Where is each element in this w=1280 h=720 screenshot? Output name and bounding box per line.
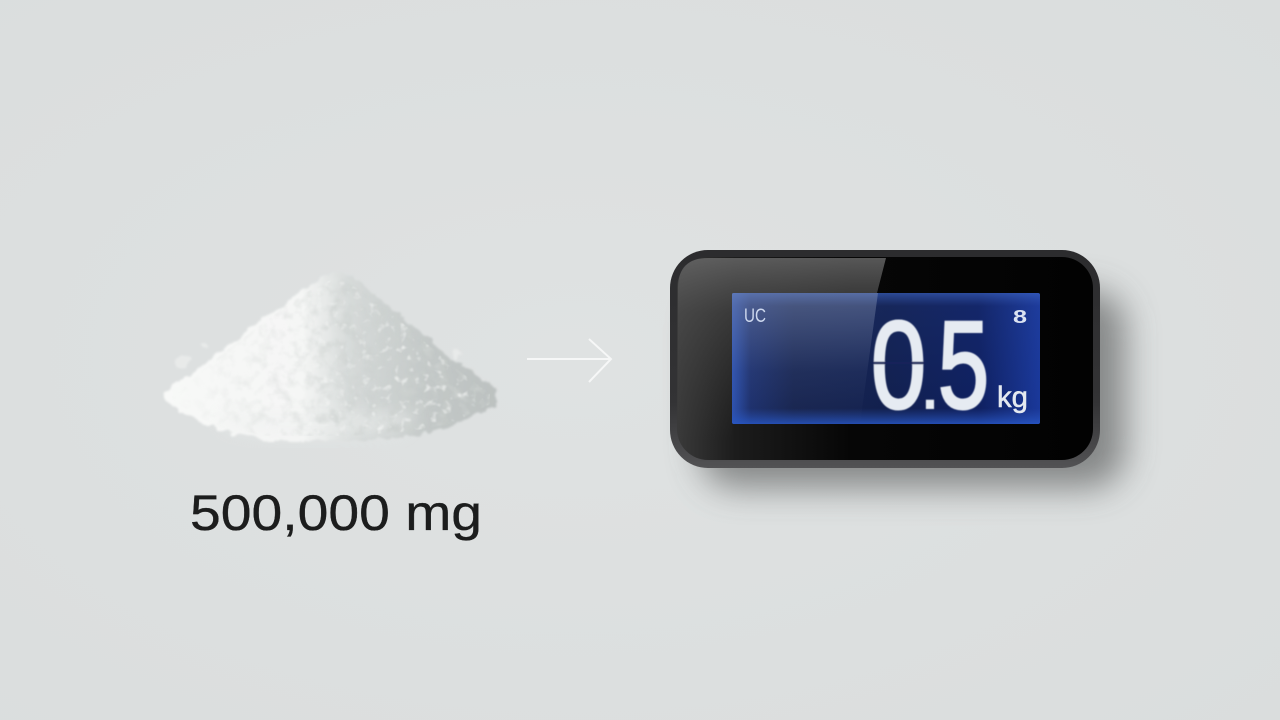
device shadow	[700, 290, 1125, 488]
status text: UC	[744, 306, 766, 327]
device body	[670, 250, 1100, 468]
status icon text: 8	[1013, 307, 1027, 327]
label: 500,000 mg: 500,000 mg	[190, 485, 482, 541]
digital scale display	[670, 250, 1125, 488]
reading 0.5: 0	[871, 297, 926, 435]
icon: powder pile	[160, 272, 497, 441]
LCD screen	[732, 293, 1040, 435]
unit kg: kg	[997, 381, 1028, 414]
glare	[678, 258, 886, 440]
reading 0.5	[871, 297, 989, 435]
reading 0.5: 5	[938, 297, 989, 435]
arrow	[527, 339, 611, 382]
reading 0.5: .	[922, 354, 938, 423]
infographic scene	[163, 250, 1148, 541]
